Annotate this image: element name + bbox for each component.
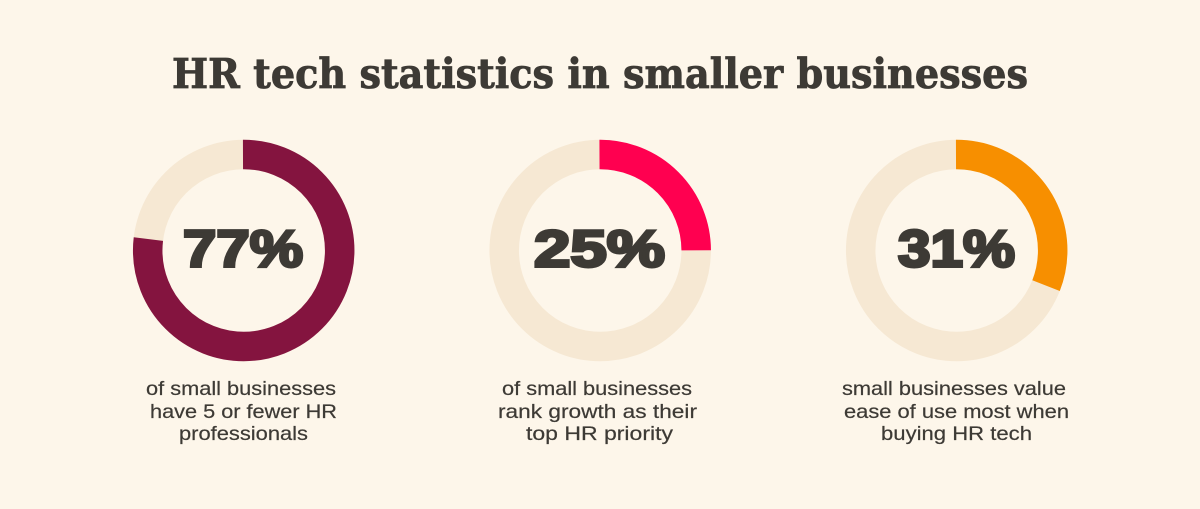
caption: 25% [498,378,698,445]
title: HR tech statistics in smaller businesses [172,50,1028,98]
caption: 31%: ease of use most when [844,401,1069,423]
panel: 25 percent statistic [498,154,698,445]
panel: 77 percent statistic [146,154,340,445]
caption: 77% [146,378,337,445]
caption: 25%: of small businesses [502,378,692,400]
caption: 31%: buying HR tech [881,423,1032,445]
donut chart: 77% [148,154,340,346]
donut chart: 31% [861,154,1053,346]
caption: 77%: professionals [179,423,308,445]
value: 25%: 25% [534,220,665,278]
caption: 25%: rank growth as their [498,401,698,423]
caption: 25%: top HR priority [526,423,673,445]
panel: 31 percent statistic [842,154,1069,445]
caption: 77%: of small businesses [146,378,336,400]
caption: 77%: have 5 or fewer HR [150,401,337,423]
caption: 31% [842,378,1069,445]
value: 31%: 31% [898,220,1015,278]
caption: 31%: small businesses value [842,378,1066,400]
donut chart: 25% [504,154,696,346]
value: 77%: 77% [183,220,303,278]
